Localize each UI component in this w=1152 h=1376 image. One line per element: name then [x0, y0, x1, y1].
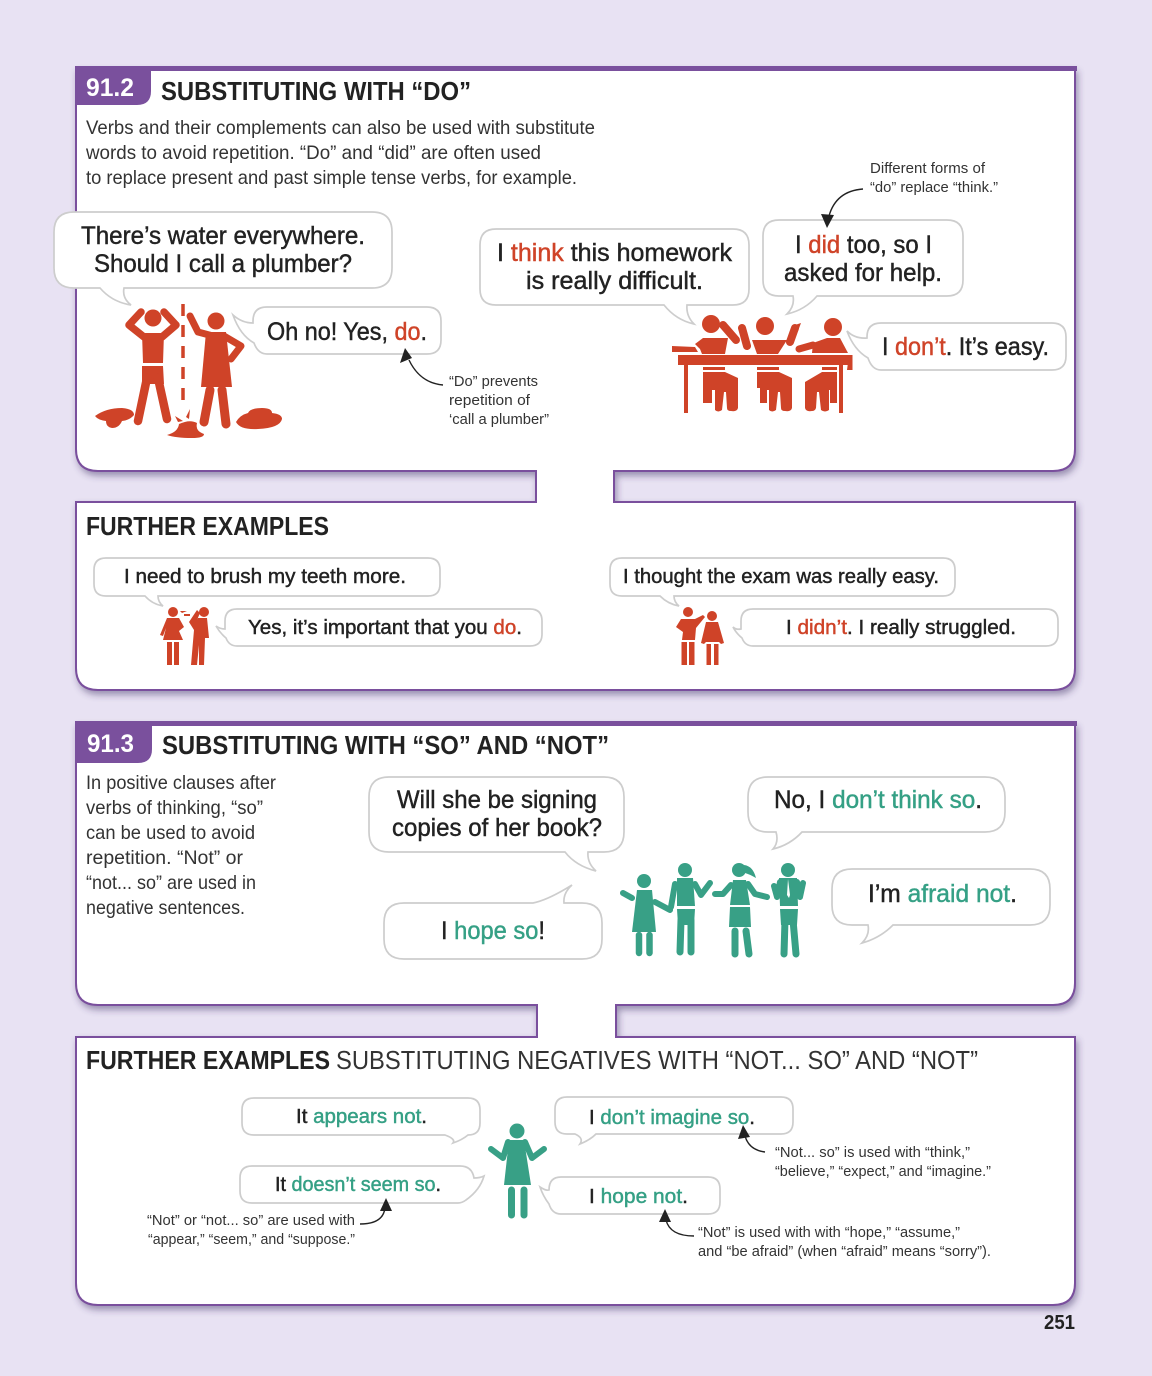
speech bubble: will she be signing	[369, 777, 624, 871]
callout: not so usage: “Not... so” is used with “think,”	[775, 1144, 970, 1161]
speech bubble: yes it's important	[216, 609, 542, 646]
speech bubble: I don't: I don’t. It’s easy.	[882, 333, 1049, 361]
illustration: two people and a leak	[95, 304, 282, 438]
panel: 91.3 substituting with so and not	[75, 721, 1077, 1305]
speech bubble: plumber question: Should I call a plumber?	[94, 250, 352, 278]
text block: intro to do: Verbs and their complements can also be used with substitute	[86, 117, 595, 139]
callout: not so usage	[738, 1125, 991, 1180]
section tab: 91.3: 91.3	[87, 730, 134, 758]
speech bubble: it appears not	[242, 1098, 480, 1143]
speech bubble: I did: asked for help.	[784, 259, 942, 287]
callout: do prevents repetition: ‘call a plumber”	[449, 411, 549, 428]
callout: do prevents repetition: “Do” prevents	[449, 373, 538, 390]
callout: do prevents repetition	[400, 348, 549, 428]
illustration: man and woman talking	[676, 607, 724, 665]
speech bubble: brush my teeth: I need to brush my teeth more.	[124, 565, 406, 588]
speech bubble: I hope so	[384, 885, 602, 959]
heading: further examples do: FURTHER EXAMPLES	[86, 511, 329, 541]
speech bubble: I did	[763, 220, 963, 314]
text block: intro to so and not: verbs of thinking, “so”	[86, 797, 263, 819]
speech bubble: oh no yes do	[233, 307, 441, 354]
text block: intro to so and not: “not... so” are used in	[86, 872, 256, 894]
callout: not or not so usage: “Not” or “not... so” are used with	[147, 1212, 355, 1229]
panel: 91.2 substituting with do	[75, 66, 1077, 690]
page number: 251	[1044, 1312, 1075, 1334]
text block: intro to so and not: In positive clauses after	[86, 772, 276, 794]
speech bubble: I didn't: I didn’t. I really struggled.	[786, 616, 1016, 639]
heading: substituting with so and not: SUBSTITUTING WITH “SO” AND “NOT”	[162, 730, 609, 760]
speech bubble: I think: is really difficult.	[526, 267, 703, 295]
speech bubble: it doesn't seem so: It doesn’t seem so.	[275, 1173, 441, 1196]
callout: not or not so usage: “appear,” “seem,” and “suppose.”	[148, 1231, 355, 1248]
speech bubble: thought exam easy	[610, 558, 955, 606]
text block: intro to so and not: can be used to avoid	[86, 822, 255, 844]
speech bubble: I hope so: I hope so!	[441, 917, 545, 945]
speech bubble: will she be signing: copies of her book?	[392, 814, 602, 842]
illustration: group of four people talking	[623, 863, 803, 954]
heading: further examples negatives: FURTHER EXAMPLES	[86, 1045, 330, 1075]
speech bubble: I didn't	[733, 609, 1058, 646]
speech bubble: plumber question	[54, 212, 392, 305]
speech bubble: plumber question: There’s water everywhere.	[81, 222, 365, 250]
speech bubble: I hope not: I hope not.	[589, 1185, 688, 1208]
speech bubble: thought exam easy: I thought the exam was really easy.	[623, 565, 939, 588]
speech bubble: I don't	[847, 323, 1066, 370]
heading: further examples negatives	[86, 1045, 978, 1075]
speech bubble: it appears not: It appears not.	[296, 1105, 427, 1128]
speech bubble: I'm afraid not: I’m afraid not.	[868, 880, 1017, 908]
illustration: woman and man brushing teeth	[160, 607, 209, 665]
section tab: 91.2	[75, 68, 151, 105]
speech bubble: oh no yes do: Oh no! Yes, do.	[267, 318, 427, 346]
text block: intro to do: words to avoid repetition. “Do” and “did” are often used	[85, 142, 541, 164]
heading: further examples negatives: SUBSTITUTING NEGATIVES WITH “NOT... SO” AND “NOT”	[336, 1045, 978, 1075]
heading: substituting with do: SUBSTITUTING WITH “DO”	[161, 76, 471, 106]
callout: different forms of do: “do” replace “think.”	[870, 179, 998, 196]
speech bubble: it doesn't seem so	[240, 1166, 484, 1203]
speech bubble: I think	[480, 229, 749, 324]
callout: not usage: and “be afraid” (when “afraid” means “sorry”).	[698, 1243, 991, 1260]
speech bubble: I think: I think this homework	[497, 239, 732, 267]
text block: intro to do: to replace present and past simple tense verbs, for example.	[86, 167, 577, 189]
text block: intro to do	[85, 117, 595, 189]
text block: intro to so and not	[86, 772, 276, 919]
speech bubble: I don't imagine so	[555, 1097, 793, 1144]
speech bubble: I don't imagine so: I don’t imagine so.	[589, 1106, 755, 1129]
illustration: three students at a table	[672, 315, 852, 413]
text block: intro to so and not: repetition. “Not” or	[86, 847, 243, 869]
speech bubble: I'm afraid not	[832, 869, 1050, 943]
callout: not or not so usage	[147, 1198, 392, 1248]
speech bubble: I hope not	[540, 1177, 720, 1214]
callout: do prevents repetition: repetition of	[449, 392, 531, 409]
callout: different forms of do: Different forms of	[870, 160, 986, 177]
speech bubble: no I don't think so: No, I don’t think so.	[774, 786, 982, 814]
illustration: woman shrugging	[491, 1124, 544, 1215]
section tab: 91.3	[75, 723, 152, 763]
callout: not so usage: “believe,” “expect,” and “imagine.”	[775, 1163, 991, 1180]
speech bubble: I did: I did too, so I	[795, 231, 932, 259]
callout: not usage	[659, 1209, 991, 1260]
callout: not usage: “Not” is used with with “hope,” “assume,”	[698, 1224, 960, 1241]
callout: different forms of do	[821, 160, 998, 228]
text block: intro to so and not: negative sentences.	[86, 897, 245, 919]
speech bubble: yes it's important: Yes, it’s important that you do.	[248, 616, 522, 639]
section tab: 91.2: 91.2	[86, 74, 134, 102]
speech bubble: no I don't think so	[748, 777, 1005, 849]
speech bubble: brush my teeth	[94, 558, 440, 606]
speech bubble: will she be signing: Will she be signing	[397, 786, 597, 814]
